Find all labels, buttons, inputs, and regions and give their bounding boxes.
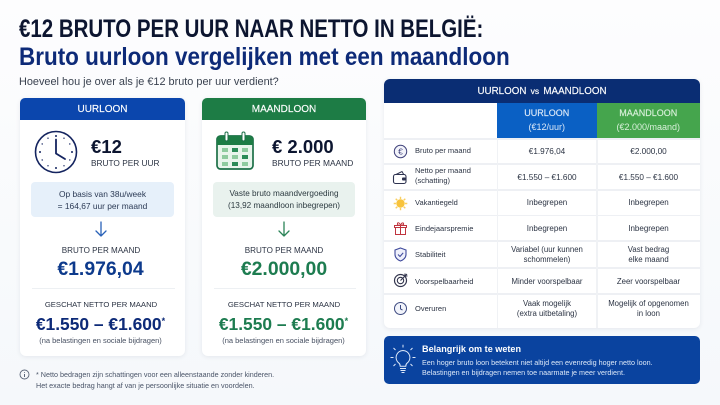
callout body: [422, 358, 653, 377]
value: netto range: €1.550 – €1.600*: [219, 314, 348, 334]
icon: shield: [394, 247, 407, 262]
note: na belastingen: (na belastingen en sociale bijdragen): [222, 336, 345, 344]
info box: basis: Op basis van 38u/week: [59, 189, 146, 199]
callout body: Belastingen en bijdragen nemen toe naarmate je meer verdient.: [422, 368, 625, 377]
row: bruto per maand: [394, 144, 667, 158]
value: bruto per maand: €2.000,00: [241, 258, 327, 280]
label: geschat netto: GESCHAT NETTO PER MAAND: [228, 300, 340, 309]
panel: uurloon: [20, 98, 185, 356]
arrow down: [95, 221, 107, 237]
row: overuren: in loon: [637, 309, 660, 318]
row: eindejaarspremie: Inbegrepen: [628, 224, 669, 232]
row: netto per maand: [392, 166, 678, 185]
panel header: uurloon: UURLOON: [77, 104, 128, 115]
column header: maandloon: [596, 103, 700, 138]
row: netto per maand: €1.550 – €1.600: [517, 173, 577, 182]
row: eindejaarspremie: Inbegrepen: [527, 224, 567, 232]
row: eindejaarspremie: Eindejaarspremie: [415, 224, 473, 232]
panel header: maandloon: MAANDLOON: [252, 104, 316, 115]
label: bruto per maand: BRUTO PER MAAND: [272, 158, 353, 168]
row: overuren: Mogelijk of opgenomen: [608, 298, 689, 308]
row: stabiliteit: elke maand: [628, 255, 669, 264]
column header: uurloon: (€12/uur): [528, 122, 565, 132]
panel header: uurloon: [20, 98, 185, 120]
footnote: Het exacte bedrag hangt af van je persoonlijke situatie en voordelen.: [36, 381, 255, 390]
row: overuren: [394, 298, 689, 318]
icon: clock small: [394, 302, 407, 315]
title: main heading: €12 BRUTO PER UUR NAAR NETTO IN BELGIË:: [19, 14, 483, 42]
row: stabiliteit: Variabel (uur kunnen: [511, 244, 583, 254]
row: voorspelbaarheid: Minder voorspelbaar: [511, 276, 583, 286]
column header: maandloon: MAANDLOON: [619, 108, 677, 118]
info box: vaste vergoeding: [213, 182, 355, 217]
arrow down: [278, 221, 290, 237]
label: geschat netto: GESCHAT NETTO PER MAAND: [45, 300, 157, 309]
row: overuren: Overuren: [415, 304, 446, 313]
panel: maandloon: [202, 98, 366, 356]
note: na belastingen: (na belastingen en sociale bijdragen): [39, 336, 162, 344]
amount: 12 euro: €12: [91, 136, 122, 157]
row: overuren: Vaak mogelijk: [523, 298, 571, 308]
table title bar: UURLOON vs MAANDLOON: [477, 86, 607, 97]
row: vakantiegeld: Vakantiegeld: [415, 198, 458, 207]
value: bruto per maand: €1.976,04: [57, 258, 144, 280]
row: eindejaarspremie: [394, 222, 669, 235]
footnote: [36, 370, 274, 390]
row: netto per maand: €1.550 – €1.600: [619, 173, 678, 182]
row: stabiliteit: [394, 244, 669, 264]
icon: sun: [394, 196, 408, 210]
row: vakantiegeld: [394, 196, 669, 210]
callout: belangrijk om te weten: [384, 336, 700, 384]
info box: vaste vergoeding: (13,92 maandloon inbegrepen): [228, 201, 340, 210]
panel header: maandloon: [202, 98, 366, 120]
row: stabiliteit: schommelen): [524, 255, 570, 264]
icon: light bulb: [390, 344, 416, 373]
panel: vergelijkingstabel: [384, 79, 700, 328]
table title bar: [384, 79, 700, 103]
row: vakantiegeld: Inbegrepen: [628, 198, 669, 207]
row: overuren: (extra uitbetaling): [517, 309, 577, 318]
icon: calendar: [216, 132, 254, 170]
icon: euro: €: [398, 146, 403, 156]
title: subheading: Bruto uurloon vergelijken met een maandloon: [19, 43, 510, 71]
info box: basis: = 164,67 uur per maand: [58, 201, 147, 211]
row: voorspelbaarheid: [394, 274, 680, 288]
callout heading: Belangrijk om te weten: [422, 344, 521, 354]
row: netto per maand: Netto per maand: [415, 166, 471, 175]
intro question: Hoeveel hou je over als je €12 bruto per uur verdient?: [19, 76, 279, 88]
row: bruto per maand: Bruto per maand: [415, 146, 471, 155]
label: bruto per maand: BRUTO PER MAAND: [62, 246, 140, 255]
icon: wallet: [392, 170, 407, 184]
icon: gift: [394, 222, 407, 235]
row: netto per maand: (schatting): [415, 176, 450, 185]
label: bruto per maand: BRUTO PER MAAND: [245, 246, 323, 255]
row: vakantiegeld: Inbegrepen: [527, 198, 567, 207]
footnote: * Netto bedragen zijn schattingen voor een alleenstaande zonder kinderen.: [36, 370, 274, 379]
column header: uurloon: [497, 103, 596, 138]
column header: uurloon: UURLOON: [524, 108, 569, 118]
icon: clock: [34, 130, 78, 174]
row: voorspelbaarheid: Voorspelbaarheid: [415, 276, 473, 286]
row: bruto per maand: €1.976,04: [529, 147, 565, 156]
row: stabiliteit: Vast bedrag: [628, 244, 669, 254]
label: bruto per uur: BRUTO PER UUR: [91, 158, 160, 168]
row: bruto per maand: €2.000,00: [630, 147, 667, 156]
icon: euro: [394, 144, 408, 158]
column header: maandloon: (€2.000/maand): [616, 122, 680, 132]
callout body: Een hoger bruto loon betekent niet altijd een evenredig hoger netto loon.: [422, 358, 653, 366]
row: stabiliteit: Stabiliteit: [415, 250, 445, 259]
info box: vaste vergoeding: Vaste bruto maandvergoeding: [229, 189, 339, 198]
value: netto range: €1.550 – €1.600*: [36, 314, 165, 334]
row: voorspelbaarheid: Zeer voorspelbaar: [617, 276, 680, 286]
info box: basis: [31, 182, 174, 217]
amount: 2000 euro: € 2.000: [272, 136, 334, 157]
icon: target: [394, 274, 408, 288]
icon: info: [20, 370, 30, 380]
